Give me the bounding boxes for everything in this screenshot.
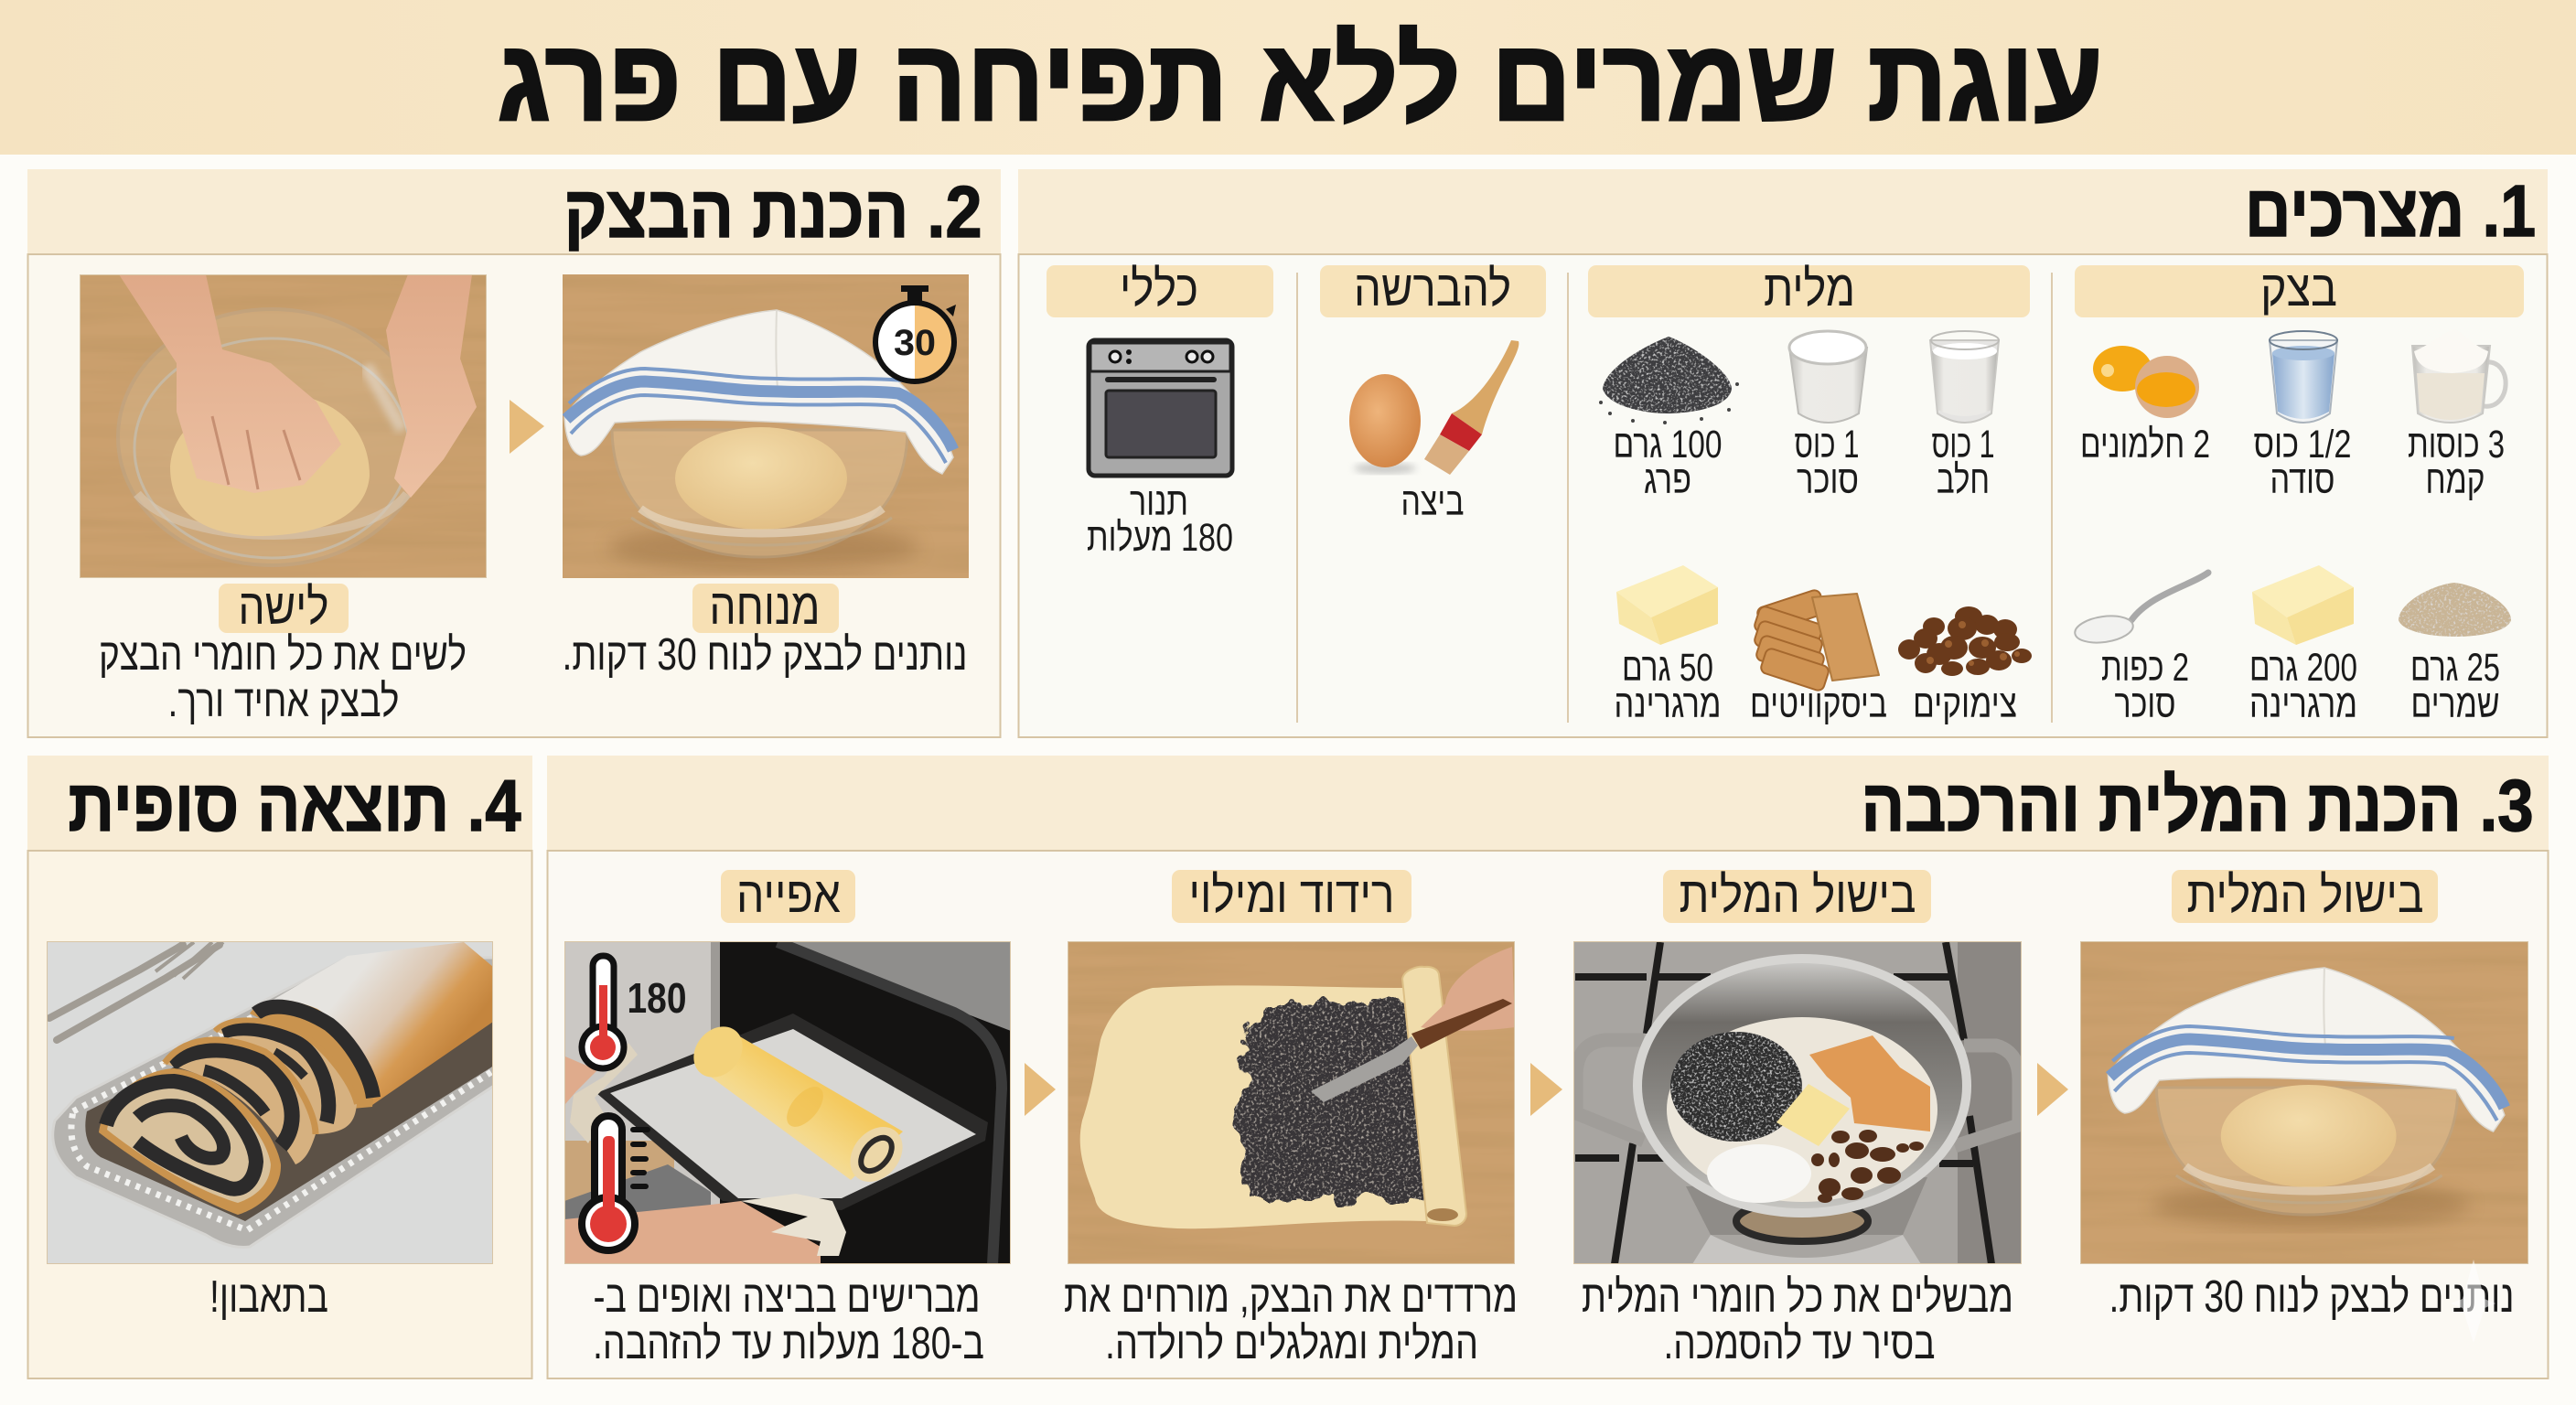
- photo: cooking filling in pot: [1573, 941, 2022, 1264]
- text: cooking description: מבשלים את כל חומרי המלית: [1582, 1272, 2013, 1322]
- ingredient: egg yolks: [2080, 346, 2210, 467]
- photo: sliced poppy roll: [47, 941, 494, 1264]
- ingredient: yeast: [2399, 583, 2511, 726]
- text: knead description: [99, 630, 467, 726]
- panel: section 3 filling and assembly: [547, 756, 2549, 1378]
- photo: baking in oven: [564, 941, 1011, 1264]
- text: baking description: [593, 1272, 984, 1368]
- ingredient: biscuits: [1750, 589, 1887, 726]
- photo: dough resting with timer: [563, 274, 969, 578]
- ingredient: raisins: [1898, 606, 2032, 726]
- heading: ingredients: 1. מצרכים: [2245, 170, 2536, 252]
- ingredient: soda water: [2254, 331, 2351, 502]
- ingredient: sugar: סוכר: [1797, 458, 1859, 502]
- ingredient: margarine dough: 200 גרם: [2249, 646, 2357, 690]
- ingredient: flour: 3 כוסות: [2408, 423, 2505, 467]
- arrow: [1025, 1063, 1056, 1116]
- text: rolling description: מרדדים את הבצק, מורחים את: [1064, 1272, 1518, 1322]
- ingredient: egg and brush: ביצה: [1401, 480, 1464, 524]
- text: rest description: נותנים לבצק לנוח 30 דקות.: [2109, 1272, 2514, 1322]
- text: knead description: לבצק אחיד ורך.: [168, 677, 399, 726]
- ingredient: sugar spoon: 2 כפות: [2101, 646, 2189, 690]
- ingredient: flour: [2408, 329, 2506, 502]
- icon: 30 minute timer: 30: [894, 323, 936, 363]
- arrow: [2037, 1063, 2068, 1116]
- sub-heading: dough: [2075, 260, 2524, 317]
- ingredient: milk: חלב: [1937, 458, 1990, 502]
- text: cooking description: בסיר עד להסמכה.: [1663, 1319, 1936, 1368]
- heading: final result: 4. תוצאה סופית: [69, 765, 521, 846]
- text: bon appetit: בתאבון!: [209, 1272, 328, 1322]
- ingredient: flour: קמח: [2426, 458, 2485, 502]
- ingredient: margarine filling: [1614, 565, 1722, 726]
- slice: [250, 1000, 375, 1109]
- sub-heading: brushing: להברשה: [1354, 260, 1511, 316]
- sub-heading: filling: מלית: [1764, 260, 1855, 316]
- ingredient: poppy seeds: [1599, 337, 1739, 502]
- ingredient: egg yolks: 2 חלמונים: [2080, 423, 2210, 467]
- title: עוגת שמרים ללא תפיחה עם פרג: [498, 16, 2102, 145]
- ingredient: raisins: צימוקים: [1913, 682, 2017, 726]
- text: baking description: ב-180 מעלות עד להזהבה.: [593, 1319, 984, 1368]
- slice: [213, 1020, 357, 1134]
- text: knead description: לשים את כל חומרי הבצק: [99, 630, 467, 680]
- step label: knead: לישה: [238, 578, 329, 635]
- ingredient: milk: [1930, 331, 1999, 502]
- ingredient: soda water: 1/2 כוס: [2254, 423, 2351, 467]
- icon: oven: תנור: [1130, 480, 1188, 524]
- panel: section 1 ingredients: [1018, 169, 2548, 737]
- text: cooking description: [1582, 1272, 2013, 1368]
- ingredient: sugar: [1789, 331, 1867, 502]
- ingredient: sugar spoon: [2073, 573, 2208, 726]
- ingredient: biscuits: ביסקוויטים: [1750, 682, 1887, 726]
- ingredient: yeast: 25 גרם: [2410, 646, 2500, 690]
- ingredient: margarine dough: מרגרינה: [2249, 682, 2357, 726]
- panel: section 2 dough: [27, 169, 1001, 737]
- arrow: [1530, 1063, 1562, 1116]
- icon: oven: [1087, 340, 1233, 560]
- photo: kneading dough: [80, 274, 487, 578]
- ingredient: margarine filling: 50 גרם: [1622, 646, 1713, 690]
- sub-heading: general: [1046, 260, 1273, 317]
- panel: section 4 final result: [27, 756, 532, 1378]
- step label: rest: מנוחה: [710, 578, 820, 635]
- icon: thermometer large: [582, 1116, 648, 1250]
- sub-heading: filling: [1588, 260, 2030, 317]
- slice: [163, 1040, 316, 1164]
- icon: 30 minute timer: [875, 285, 956, 381]
- sub-heading: general: כללי: [1120, 260, 1198, 316]
- heading: dough prep: 2. הכנת הבצק: [564, 171, 982, 252]
- photo: rolling and filling: [1068, 941, 1515, 1264]
- icon: oven: 180 מעלות: [1087, 516, 1233, 560]
- icon: thermometer 180: [582, 956, 686, 1068]
- photo: dough resting under towel: [2080, 941, 2528, 1264]
- ingredient: yeast: שמרים: [2411, 682, 2499, 726]
- ingredient: soda water: סודה: [2270, 458, 2334, 502]
- ingredient: sugar spoon: סוכר: [2115, 682, 2175, 726]
- ingredient: egg and brush: [1349, 340, 1519, 524]
- text: rest description: נותנים לבצק לנוח 30 דקות.: [562, 630, 968, 680]
- icon: thermometer 180: 180: [628, 974, 686, 1022]
- step label: cooking filling 2: בישול המלית: [2186, 866, 2424, 923]
- ingredient: sugar: 1 כוס: [1795, 423, 1859, 467]
- text: rolling description: המלית ומגלגלים לרולדה.: [1105, 1319, 1478, 1368]
- step label: baking: אפייה: [736, 866, 841, 923]
- step label: rolling and filling: רידוד ומילוי: [1189, 866, 1394, 923]
- step label: cooking filling: בישול המלית: [1680, 866, 1916, 923]
- ingredient: margarine filling: מרגרינה: [1614, 682, 1722, 726]
- arrow: [510, 400, 544, 454]
- ingredient: poppy seeds: פרג: [1644, 458, 1691, 502]
- text: rolling description: [1064, 1272, 1518, 1368]
- text: baking description: מברישים בביצה ואופים ב-: [593, 1272, 981, 1322]
- ingredient: margarine dough: [2249, 565, 2357, 726]
- slice: [99, 1068, 281, 1215]
- heading: filling and assembly: 3. הכנת המלית והרכבה: [1861, 765, 2534, 846]
- ingredient: milk: 1 כוס: [1932, 423, 1994, 467]
- title banner: [0, 0, 2576, 155]
- ingredient: poppy seeds: 100 גרם: [1614, 423, 1722, 467]
- sub-heading: dough: בצק: [2260, 260, 2337, 316]
